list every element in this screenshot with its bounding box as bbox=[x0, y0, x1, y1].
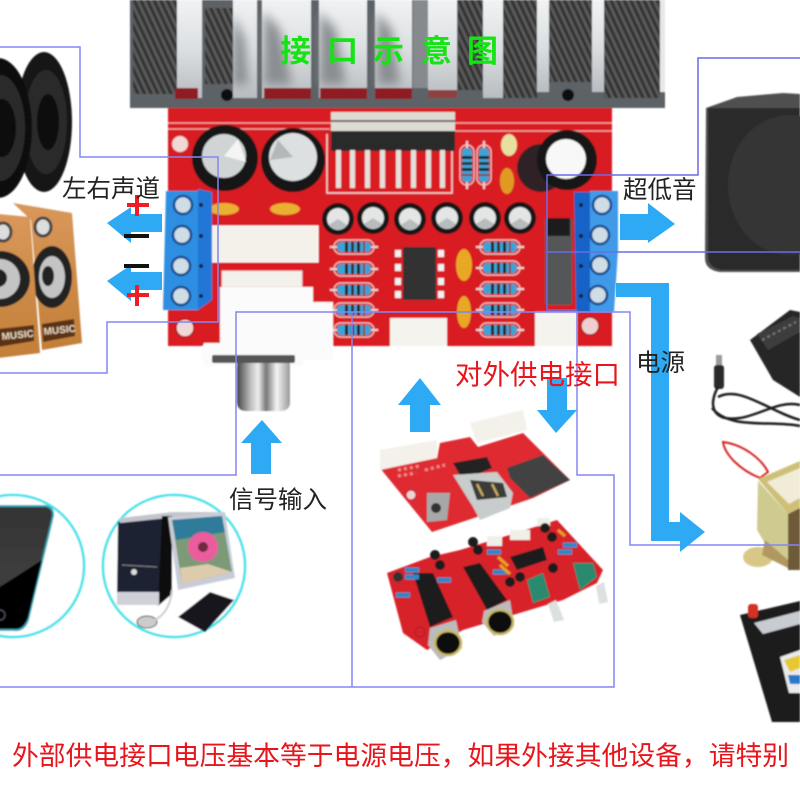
resistors bbox=[330, 240, 524, 337]
external power wiring bbox=[0, 312, 614, 687]
RCA input socket bbox=[200, 287, 333, 411]
heatsink bbox=[130, 0, 665, 108]
plus sign lower bbox=[127, 285, 149, 306]
bottom note: 外部供电接口电压基本等于电源电压，如果外接其他设备，请特别 bbox=[12, 741, 789, 771]
white connectors bbox=[211, 226, 577, 346]
arrow: left channel upper bbox=[107, 207, 162, 243]
arrow: subwoofer output bbox=[620, 203, 675, 243]
op-amp chip bbox=[395, 247, 444, 300]
label: power: 电源 bbox=[636, 349, 685, 377]
subwoofer bbox=[705, 93, 800, 272]
wooden speaker cabinets: MUSIC bbox=[43, 324, 76, 338]
left terminal block bbox=[163, 189, 212, 310]
minus sign lower bbox=[124, 264, 149, 268]
wooden speaker cabinets: MUSIC bbox=[1, 329, 34, 343]
power amplifier chip bbox=[327, 112, 455, 193]
label: external power port: 对外供电接口 bbox=[455, 359, 620, 390]
arrow: power out down bbox=[537, 378, 577, 433]
arrow: left channel lower bbox=[107, 265, 162, 301]
big capacitors bbox=[192, 125, 597, 192]
vertical resistors and small parts bbox=[209, 134, 517, 328]
label: left and right channels: 左右声道 bbox=[62, 175, 160, 203]
plus sign upper bbox=[127, 195, 149, 216]
subwoofer wiring bbox=[547, 58, 800, 310]
left speakers bbox=[0, 52, 72, 198]
expansion board: tone control bbox=[387, 518, 608, 660]
label: subwoofer: 超低音 bbox=[623, 176, 696, 204]
title: 接口示意图 bbox=[280, 34, 498, 69]
small capacitors bbox=[322, 202, 536, 235]
arrow: signal input bbox=[241, 420, 282, 474]
car battery bbox=[740, 601, 800, 722]
label: signal input: 信号输入 bbox=[229, 486, 327, 514]
phone in cyan circle bbox=[0, 495, 84, 637]
signal input wiring bbox=[0, 312, 800, 545]
wooden speaker cabinets bbox=[0, 203, 82, 358]
arrow: power out up bbox=[398, 378, 441, 432]
right terminal block bbox=[574, 191, 618, 312]
arrow: power input bbox=[616, 283, 705, 552]
power adapter bbox=[712, 310, 800, 426]
inductor bbox=[545, 218, 572, 305]
computer in cyan circle bbox=[103, 495, 245, 637]
expansion board: USB bbox=[380, 410, 570, 532]
PCB silkscreen lines bbox=[168, 123, 612, 131]
mounting holes bbox=[172, 136, 599, 337]
left channel wiring bbox=[0, 47, 218, 373]
transformer bbox=[723, 442, 800, 570]
minus sign upper bbox=[124, 234, 149, 238]
PCB bbox=[168, 106, 612, 346]
